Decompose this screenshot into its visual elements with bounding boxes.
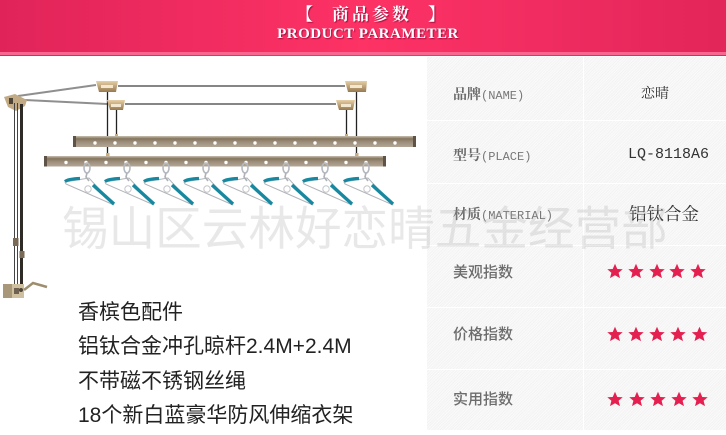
heading: Chinese title: 商品参数: [332, 5, 412, 24]
row label: beauty index: 美观指数: [453, 264, 513, 281]
heading: Chinese title: 【: [296, 5, 313, 24]
left wall bracket and cords: [4, 85, 107, 284]
row label: utility index: 实用指数: [453, 391, 513, 408]
upper aluminium bar: [73, 136, 416, 147]
row background: beauty label: [427, 246, 583, 307]
row value: brand: 恋晴: [641, 87, 669, 102]
heading: Chinese title: 】: [428, 5, 445, 24]
row label: brand: 品牌(NAME): [453, 88, 524, 103]
row background: model label: [427, 121, 583, 183]
row background: model value: [584, 121, 726, 183]
heading: Chinese title: [296, 5, 445, 24]
row label: model: 型号(PLACE): [453, 149, 531, 164]
row background: utility value: [584, 370, 726, 430]
ceiling pulleys: [96, 81, 367, 157]
row label: material: 材质(MATERIAL): [453, 208, 553, 223]
feature text: line 1: 香槟色配件: [78, 301, 183, 324]
feature text: line 3: 不带磁不锈钢丝绳: [78, 370, 246, 393]
row background: brand value: [584, 57, 726, 120]
stars: utility: [607, 392, 708, 406]
watermark: 锡山区云林好恋晴五金经营部: [62, 192, 668, 259]
row background: material value: [584, 184, 726, 245]
winch crank base: [3, 283, 47, 298]
row background: beauty value: [584, 246, 726, 307]
parameter table: [427, 57, 726, 430]
row background: material label: [427, 184, 583, 245]
row value: model: LQ-8118A6: [628, 146, 709, 163]
product illustration: drying rack: [3, 81, 416, 298]
feature text: line 2: 铝钛合金冲孔晾杆2.4M+2.4M: [78, 335, 352, 358]
star ratings: [607, 264, 708, 406]
feature text: line 4: 18个新白蓝豪华防风伸缩衣架: [78, 404, 353, 427]
lower aluminium bar: [44, 156, 386, 166]
header divider band: [0, 52, 726, 55]
stars: price: [607, 327, 707, 341]
stars: beauty: [607, 264, 706, 278]
hangers row: [65, 163, 393, 205]
heading: English title: PRODUCT PARAMETER: [277, 26, 459, 42]
row label: price index: 价格指数: [453, 326, 513, 343]
row background: utility label: [427, 370, 583, 430]
row background: price value: [584, 308, 726, 369]
row background: price label: [427, 308, 583, 369]
overhead cables: [108, 86, 356, 155]
row background: brand label: [427, 57, 583, 120]
header banner: [0, 0, 726, 56]
row value: material: 铝钛合金: [629, 204, 699, 224]
